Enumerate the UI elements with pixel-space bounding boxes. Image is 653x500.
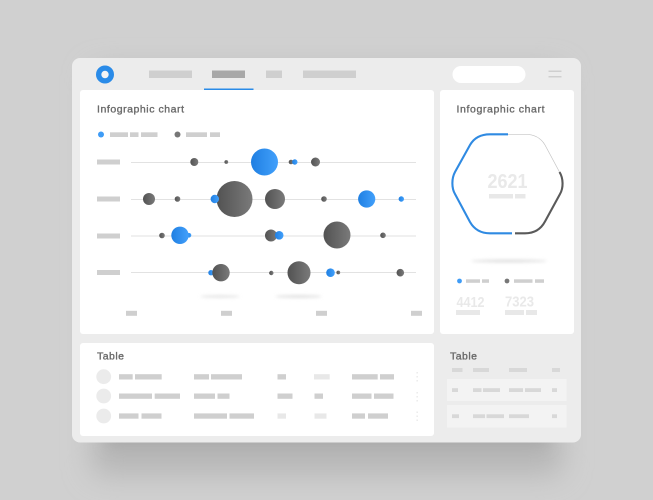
- chart row 2: [97, 181, 416, 217]
- table row 2: [96, 389, 418, 403]
- heading: infographic chart: Infographic chart: [97, 104, 184, 116]
- side table row 2: [447, 405, 566, 428]
- side table row 1: [447, 379, 566, 401]
- top navigation: [96, 66, 562, 90]
- legend: [457, 279, 544, 283]
- icon: menu: [548, 70, 562, 78]
- nav items: [149, 70, 356, 78]
- center value: 2621: [488, 171, 528, 193]
- legend: [98, 132, 220, 138]
- stat: 4412: 4412: [456, 295, 484, 311]
- panel: bubble chart: [80, 90, 434, 334]
- panel: hexagon chart: [440, 90, 574, 334]
- panel: main table: [80, 343, 434, 436]
- dashboard window: [72, 58, 581, 442]
- x axis labels: [126, 311, 422, 316]
- window shadow: [92, 70, 562, 475]
- table header: [452, 368, 560, 372]
- chart row 4: [97, 261, 416, 284]
- heading: infographic chart: Infographic chart: [456, 104, 545, 116]
- stat: 7323: 7323: [505, 294, 534, 310]
- active tab underline: [204, 88, 254, 90]
- bubble shadows: [200, 295, 322, 298]
- hexagon ring chart: [452, 134, 563, 233]
- panel: side table: [447, 350, 566, 428]
- hexagon shadow: [471, 260, 547, 262]
- table row 1: [96, 369, 418, 384]
- heading: table: Table: [450, 350, 477, 362]
- chart row 1: [97, 148, 416, 176]
- heading: table: Table: [97, 350, 124, 362]
- icon: logo ring: [96, 66, 114, 84]
- search box: [452, 66, 526, 83]
- chart row 3: [97, 222, 416, 248]
- table row 3: [96, 409, 418, 423]
